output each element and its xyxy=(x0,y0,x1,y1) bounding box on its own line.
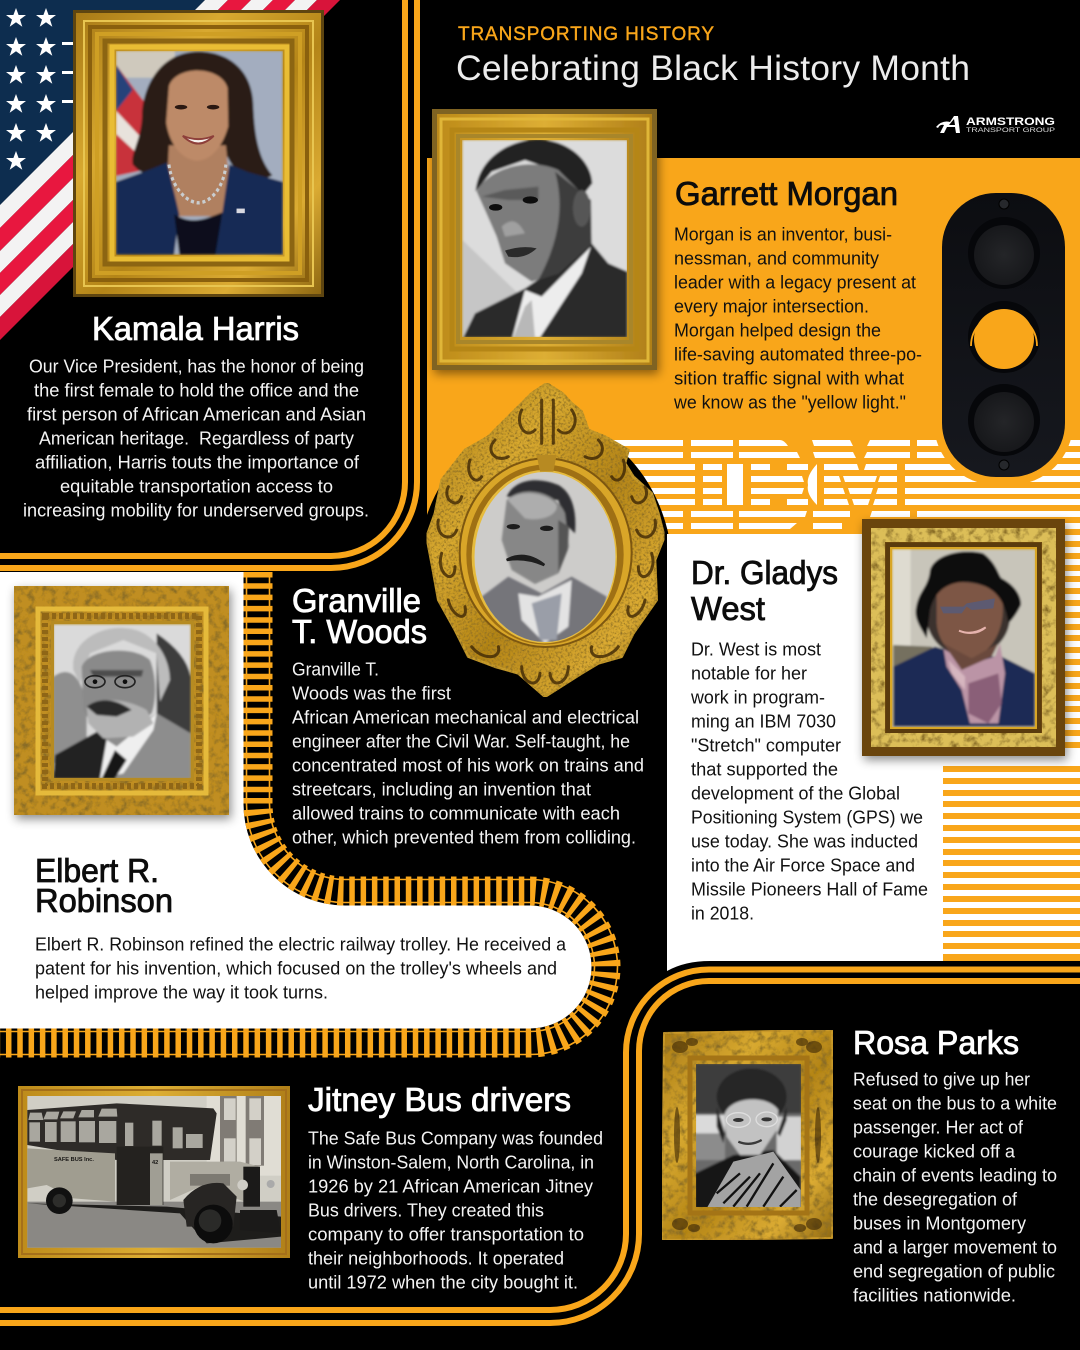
text block: Kamala Harris bio: the first female to hold the office and the xyxy=(34,379,359,400)
text block: Rosa Parks bio xyxy=(853,1068,1057,1305)
text block: Elbert R. Robinson bio xyxy=(35,933,567,1002)
text block: Rosa Parks bio: buses in Montgomery xyxy=(853,1212,1027,1233)
text block: Granville T. Woods bio: other, which prevented them from colliding. xyxy=(292,826,636,847)
text block: Garrett Morgan bio: nessman, and community xyxy=(674,247,880,268)
picture frame: Jitney bus photo xyxy=(18,1086,290,1258)
heading: Kamala Harris: Kamala Harris xyxy=(92,310,299,347)
text block: Garrett Morgan bio: Morgan is an inventor, busi- xyxy=(674,223,892,244)
logo: Armstrong Transport Group xyxy=(936,116,1055,134)
text block: Dr. Gladys West bio: that supported the xyxy=(691,758,838,779)
text block: Garrett Morgan bio: leader with a legacy present at xyxy=(674,271,916,292)
railroad track xyxy=(0,572,618,1054)
picture frame: Jitney bus photo: SAFE BUS Inc. xyxy=(54,1157,94,1163)
text block: Jitney Bus drivers bio: company to offer transportation to xyxy=(308,1223,584,1244)
text block: Dr. Gladys West bio: notable for her xyxy=(691,662,807,683)
heading: Elbert R. Robinson: Robinson xyxy=(35,882,173,919)
text block: Garrett Morgan bio: we know as the "yellow light." xyxy=(673,391,906,412)
panel: Garrett Morgan xyxy=(432,109,1073,485)
text block: Jitney Bus drivers bio: 1926 by 21 African American Jitney xyxy=(308,1175,594,1196)
heading: Granville T. Woods: Granville xyxy=(292,582,421,619)
text block: Dr. Gladys West bio: use today. She was inducted xyxy=(691,830,918,851)
rails: bottom double line xyxy=(0,970,1080,1323)
picture frame: Rosa Parks portrait xyxy=(662,1030,833,1240)
text block: Kamala Harris bio: equitable transportation access to xyxy=(60,475,333,496)
text block: Kamala Harris bio: Our Vice President, has the honor of being xyxy=(29,355,364,376)
text block: Rosa Parks bio: facilities nationwide. xyxy=(853,1284,1016,1305)
picture frame: Jitney bus photo: 42 xyxy=(152,1160,158,1166)
heading: Rosa Parks: Rosa Parks xyxy=(853,1024,1019,1061)
icon: American flag ribbon xyxy=(0,0,340,340)
text block: Jitney Bus drivers bio: their neighborhoods. It operated xyxy=(308,1247,564,1268)
heading: Granville T. Woods xyxy=(292,582,427,650)
text block: Granville T. Woods bio: concentrated most of his work on trains and xyxy=(292,754,644,775)
text block: Kamala Harris bio: first person of African American and Asian xyxy=(27,403,366,424)
text block: Garrett Morgan bio: sition traffic signal with what xyxy=(674,367,904,388)
text block: Dr. Gladys West bio: ming an IBM 7030 xyxy=(691,710,836,731)
text block: Jitney Bus drivers bio: Bus drivers. They created this xyxy=(308,1199,544,1220)
panel: Rosa Parks xyxy=(662,1024,1057,1305)
text block: Elbert R. Robinson bio: helped improve the way it took turns. xyxy=(35,981,328,1002)
text block: Garrett Morgan bio xyxy=(673,223,922,412)
text block: Jitney Bus drivers bio: The Safe Bus Company was founded xyxy=(308,1127,603,1148)
logo: Armstrong Transport Group: TRANSPORT GROUP xyxy=(966,127,1055,134)
text block: Dr. Gladys West bio xyxy=(690,638,928,923)
text block: Dr. Gladys West bio: Positioning System (GPS) we xyxy=(691,806,923,827)
text block: Jitney Bus drivers bio: until 1972 when the city bought it. xyxy=(308,1271,578,1292)
heading: Dr. Gladys West: West xyxy=(691,590,765,627)
logo: Armstrong Transport Group: ARMSTRONG xyxy=(966,116,1055,128)
text block: Jitney Bus drivers bio xyxy=(308,1127,603,1292)
text block: Rosa Parks bio: passenger. Her act of xyxy=(853,1116,1024,1137)
text block: Garrett Morgan bio: Morgan helped design the xyxy=(674,319,881,340)
picture frame: Kamala Harris portrait xyxy=(73,10,324,297)
panel: Jitney Bus drivers xyxy=(18,1081,603,1292)
heading: Dr. Gladys West: Dr. Gladys xyxy=(691,554,838,591)
text block: Rosa Parks bio: the desegregation of xyxy=(853,1188,1018,1209)
panel: Dr. Gladys West white background and stripes xyxy=(667,529,1080,971)
panel: Kamala Harris xyxy=(0,0,369,520)
picture frame: Garrett Morgan portrait xyxy=(432,109,657,370)
text block: Dr. Gladys West bio: "Stretch" computer xyxy=(691,734,841,755)
panel: white Elbert R. Robinson background xyxy=(0,572,592,1029)
black oval backdrop xyxy=(417,420,673,730)
text block: Granville T. Woods bio: engineer after the Civil War. Self-taught, he xyxy=(292,730,630,751)
heading: Dr. Gladys West xyxy=(691,554,838,627)
IBM logo stripes xyxy=(600,440,1080,529)
heading: Elbert R. Robinson: Elbert R. xyxy=(35,852,159,889)
text block: Dr. Gladys West bio: in 2018. xyxy=(691,902,754,923)
panel: Dr. Gladys West xyxy=(690,519,1065,923)
text block: Dr. Gladys West bio: Dr. West is most xyxy=(691,638,821,659)
text block: Dr. Gladys West bio: Missile Pioneers Hall of Fame xyxy=(691,878,928,899)
heading: Granville T. Woods: T. Woods xyxy=(292,613,427,650)
text block: Granville T. Woods bio xyxy=(292,658,644,847)
panel: orange Garrett Morgan background with IBM stripes xyxy=(427,158,1080,534)
text block: Dr. Gladys West bio: work in program- xyxy=(690,686,825,707)
text block: Garrett Morgan bio: life-saving automated three-po- xyxy=(674,343,922,364)
rails: top-left double line xyxy=(0,0,417,568)
heading: Jitney Bus drivers: Jitney Bus drivers xyxy=(308,1081,571,1118)
text block: Dr. Gladys West bio: into the Air Force Space and xyxy=(691,854,915,875)
text block: Dr. Gladys West bio: development of the Global xyxy=(691,782,900,803)
text block: Kamala Harris bio: increasing mobility for underserved groups. xyxy=(23,499,369,520)
text block: Granville T. Woods bio: allowed trains to communicate with each xyxy=(292,802,620,823)
text block: Rosa Parks bio: Refused to give up her xyxy=(853,1068,1030,1089)
text block: Granville T. Woods bio: African American mechanical and electrical xyxy=(292,706,639,727)
text block: Rosa Parks bio: courage kicked off a xyxy=(853,1140,1016,1161)
text block: Kamala Harris bio: American heritage. Regardless of party xyxy=(39,427,355,448)
text block: Rosa Parks bio: seat on the bus to a white xyxy=(853,1092,1057,1113)
heading: Garrett Morgan: Garrett Morgan xyxy=(675,175,898,212)
text block: Jitney Bus drivers bio: in Winston-Salem, North Carolina, in xyxy=(308,1151,594,1172)
text block: Granville T. Woods bio: streetcars, including an invention that xyxy=(292,778,591,799)
text block: Rosa Parks bio: and a larger movement to xyxy=(853,1236,1057,1257)
text block: Granville T. Woods bio: Woods was the first xyxy=(292,682,451,703)
header xyxy=(456,24,970,88)
panel: Elbert R. Robinson xyxy=(14,586,567,1002)
panel: Granville T. Woods xyxy=(292,383,664,847)
eyebrow heading: TRANSPORTING HISTORY xyxy=(458,24,714,45)
text block: Kamala Harris bio: affiliation, Harris touts the importance of xyxy=(35,451,360,472)
text block: Elbert R. Robinson bio: Elbert R. Robinson refined the electric railway trolley. He received a xyxy=(35,933,567,954)
picture frame: Granville T. Woods oval portrait xyxy=(427,383,664,697)
text block: Granville T. Woods bio: Granville T. xyxy=(292,658,379,679)
main title: Celebrating Black History Month xyxy=(456,48,970,88)
text block: Elbert R. Robinson bio: patent for his invention, which focused on the trolley's wheels and xyxy=(35,957,557,978)
icon: traffic light xyxy=(934,185,1073,485)
picture frame: Elbert R. Robinson portrait xyxy=(14,586,229,815)
text block: Garrett Morgan bio: every major intersection. xyxy=(674,295,869,316)
heading: Elbert R. Robinson xyxy=(35,852,173,919)
picture frame: Dr. Gladys West portrait xyxy=(862,519,1065,756)
text block: Rosa Parks bio: end segregation of public xyxy=(853,1260,1055,1281)
text block: Kamala Harris bio xyxy=(23,355,369,520)
text block: Rosa Parks bio: chain of events leading to xyxy=(853,1164,1057,1185)
